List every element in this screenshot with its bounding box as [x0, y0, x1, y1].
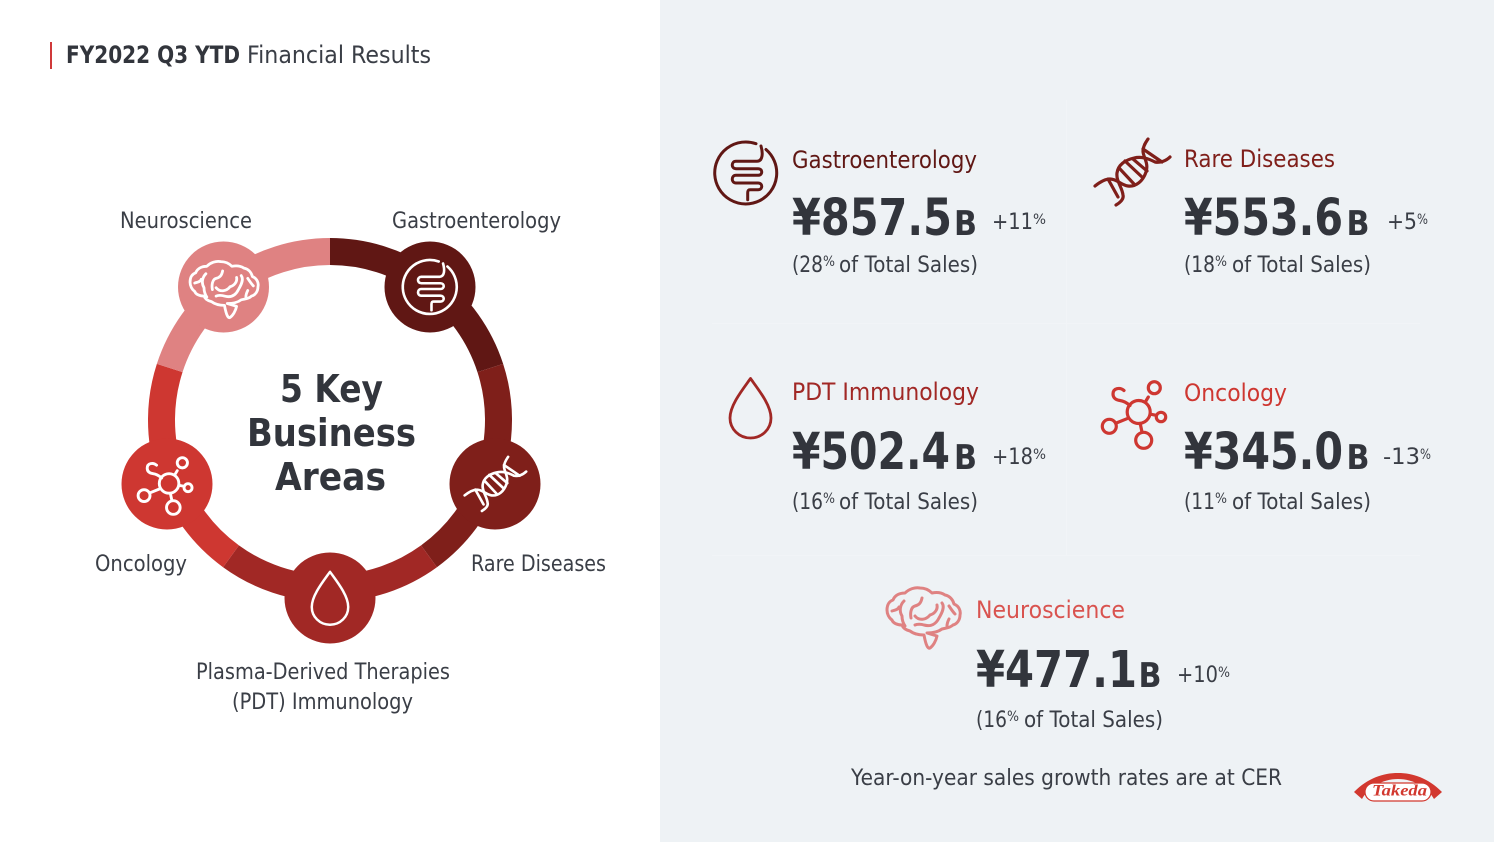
node: oncology	[122, 438, 212, 530]
icon: DNA	[1095, 139, 1170, 205]
share of total sales: of Total Sales)	[1232, 490, 1371, 515]
growth rate: -13	[1383, 445, 1420, 470]
growth rate: %	[1033, 447, 1046, 463]
card: Oncology	[1102, 379, 1431, 515]
growth rate: +10	[1177, 663, 1218, 688]
card: PDT Immunology	[730, 378, 1046, 515]
sales value: ¥502.4	[792, 423, 950, 482]
ring segment: gastroenterology	[330, 252, 490, 368]
share of total sales: of Total Sales)	[839, 253, 978, 278]
title: Financial Results	[247, 41, 431, 69]
share of total sales: of Total Sales)	[839, 490, 978, 515]
title: FY2022 Q3 YTD	[66, 41, 240, 69]
sales value: B	[954, 438, 977, 478]
share of total sales: %	[823, 254, 835, 270]
growth rate: %	[1218, 665, 1230, 681]
label: Oncology: Oncology	[95, 552, 187, 577]
icon: intestine	[715, 142, 777, 204]
panel: right background	[660, 0, 1494, 842]
ring segment: oncology	[161, 368, 231, 556]
ring segment: rare diseases	[429, 368, 499, 556]
category name: Oncology	[1184, 379, 1287, 407]
card: Rare Diseases	[1095, 139, 1428, 278]
card: Neuroscience	[887, 588, 1230, 733]
title	[50, 41, 431, 69]
node: gastroenterology	[384, 242, 476, 332]
icon: molecule	[1102, 382, 1166, 448]
share of total sales: of Total Sales)	[1232, 253, 1371, 278]
label: Neuroscience: Neuroscience	[120, 209, 252, 234]
ring segment: PDT immunology	[231, 556, 429, 588]
growth rate: %	[1417, 212, 1428, 228]
sales value: ¥477.1	[976, 641, 1137, 700]
sales value: B	[1346, 438, 1370, 478]
share of total sales	[792, 253, 978, 278]
chart: 5 key business areas ring	[122, 242, 540, 644]
share of total sales: (16	[792, 490, 823, 515]
label: Plasma-Derived Therapies (PDT) Immunology: (PDT) Immunology	[232, 690, 413, 715]
sales value: ¥553.6	[1184, 189, 1343, 248]
logo: Takeda: Takeda	[1372, 782, 1427, 800]
share of total sales: %	[1215, 491, 1227, 507]
share of total sales: %	[1007, 709, 1019, 725]
share of total sales	[1184, 253, 1371, 278]
growth rate: +11	[992, 210, 1033, 235]
label: Plasma-Derived Therapies (PDT) Immunology: Plasma-Derived Therapies	[196, 660, 450, 685]
share of total sales: (11	[1184, 490, 1215, 515]
ring segment: neuroscience	[170, 252, 330, 368]
center text: 5 Key	[280, 367, 383, 411]
share of total sales	[1184, 490, 1371, 515]
category name: Gastroenterology	[792, 146, 977, 174]
node: PDT immunology	[284, 552, 376, 644]
category name: Neuroscience	[976, 596, 1125, 624]
icon: drop	[730, 378, 771, 438]
share of total sales	[976, 708, 1163, 733]
label: Rare Diseases: Rare Diseases	[471, 552, 606, 577]
growth rate: +18	[992, 445, 1033, 470]
node: rare diseases	[450, 438, 540, 530]
node: neuroscience	[178, 242, 269, 332]
growth rate: %	[1420, 447, 1431, 463]
growth rate: +5	[1387, 210, 1417, 235]
share of total sales: (16	[976, 708, 1007, 733]
center text: Business	[247, 411, 416, 455]
center text	[247, 367, 416, 499]
category name: Rare Diseases	[1184, 145, 1335, 173]
icon: brain	[887, 588, 960, 648]
category name: PDT Immunology	[792, 378, 979, 406]
sales value: B	[954, 204, 977, 244]
share of total sales: of Total Sales)	[1024, 708, 1163, 733]
label: Gastroenterology: Gastroenterology	[392, 209, 561, 234]
footnote: Year-on-year sales growth rates are at CER	[850, 766, 1282, 791]
sales value: B	[1138, 656, 1162, 696]
share of total sales: %	[1215, 254, 1227, 270]
card: Gastroenterology	[715, 142, 1046, 278]
share of total sales: (28	[792, 253, 823, 278]
share of total sales	[792, 490, 978, 515]
share of total sales: (18	[1184, 253, 1215, 278]
center text: Areas	[275, 455, 386, 499]
growth rate: %	[1033, 212, 1046, 228]
sales value: B	[1346, 204, 1370, 244]
logo: Takeda	[1354, 773, 1442, 801]
share of total sales: %	[823, 491, 835, 507]
label: Plasma-Derived Therapies (PDT) Immunology	[196, 660, 450, 715]
sales value: ¥345.0	[1184, 423, 1343, 482]
sales value: ¥857.5	[792, 189, 952, 248]
